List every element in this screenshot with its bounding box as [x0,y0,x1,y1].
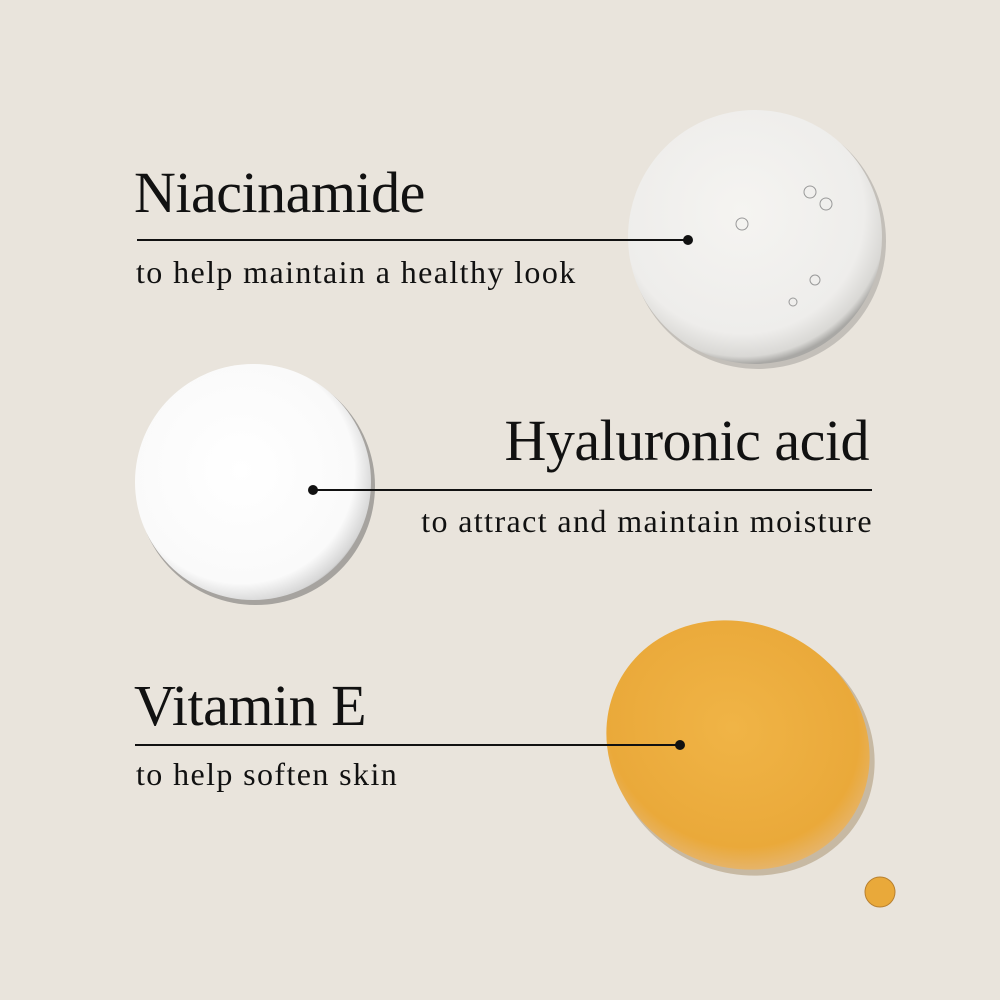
text: niacinamide desc: to help maintain a healthy look [136,254,577,290]
connector line 2 [313,489,872,491]
heading: Niacinamide: Niacinamide [134,160,425,225]
heading: Vitamin E: Vitamin E [134,673,366,738]
drop: vitamin E [561,573,921,924]
text: hyaluronic desc: to attract and maintain moisture [421,503,873,539]
connector line 1 [137,239,688,241]
drop: hyaluronic [135,364,375,605]
connector line 3 [135,744,680,746]
heading: Hyaluronic acid: Hyaluronic acid [504,408,869,473]
text: vitamin E desc: to help soften skin [136,756,398,792]
drop: niacinamide [628,110,886,369]
